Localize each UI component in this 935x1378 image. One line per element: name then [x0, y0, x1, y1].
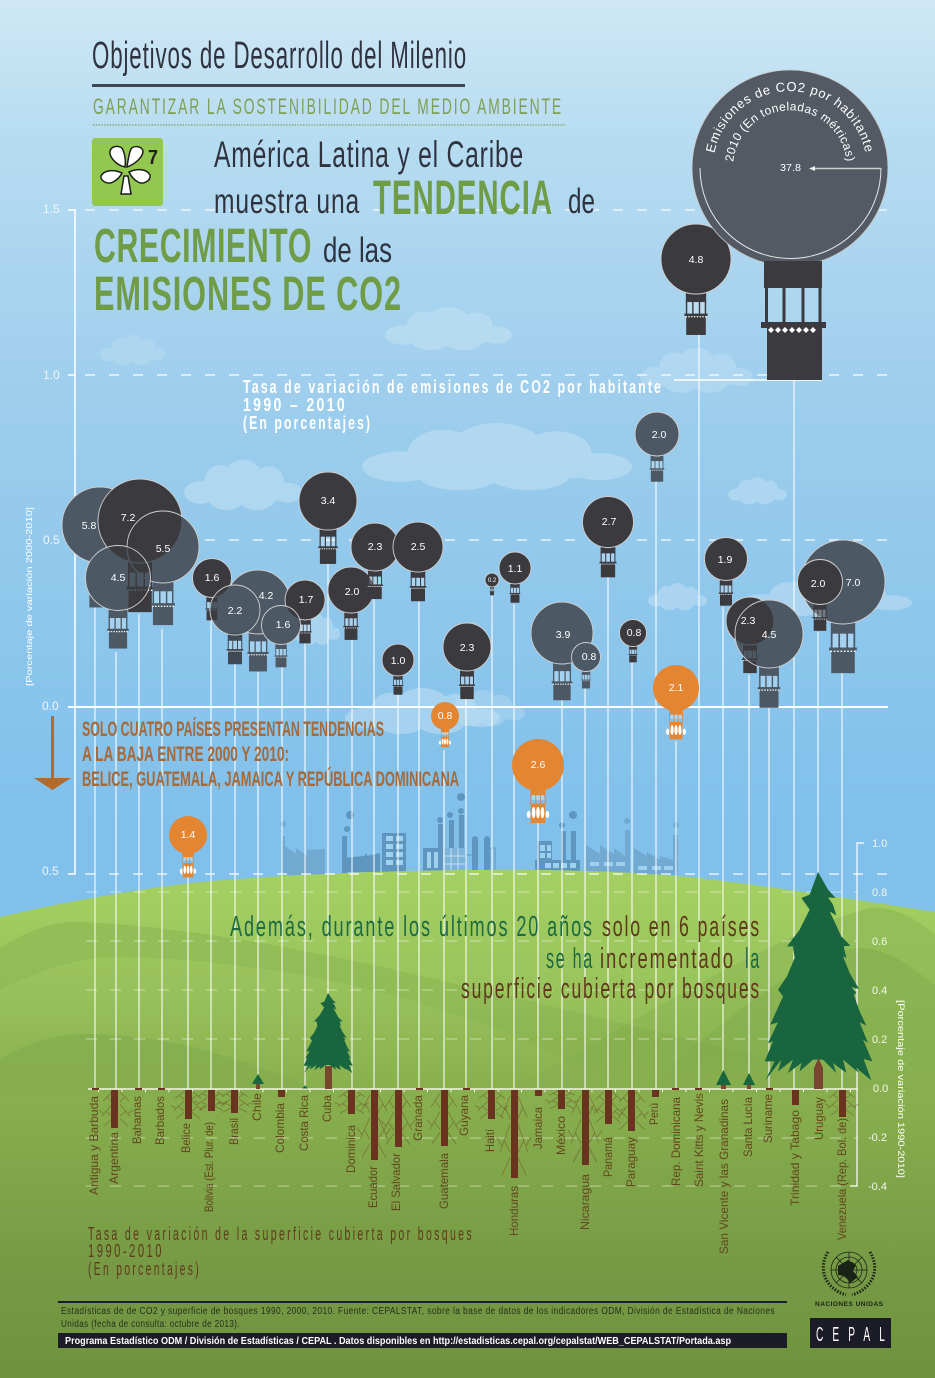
chart title: forests: 1990-2010	[88, 1241, 164, 1261]
forest gridlines	[86, 892, 858, 1186]
balloon: Suriname 4.5: 4.5	[762, 629, 776, 641]
balloon: México 3.9	[531, 602, 593, 700]
balloon: Uruguay 2.0: 2.0	[811, 578, 825, 590]
CO2 chart axes: left axis with gridlines: 1.5	[43, 202, 60, 216]
icon: goal 7 clover	[92, 138, 163, 206]
headline: TENDENCIA	[373, 172, 553, 225]
factory 3	[423, 793, 495, 874]
balloon: Belice 1.4 (downward)	[169, 816, 207, 877]
country labels: Guyana	[457, 1095, 471, 1136]
balloon: Cuba 3.4: 3.4	[321, 495, 335, 507]
icon: goal 7 clover: 7	[148, 147, 158, 169]
CO2 chart axes: left axis with gridlines	[42, 202, 888, 878]
country labels: Paraguay	[624, 1137, 638, 1187]
footer link bar: Programa Estadístico ODM / División de Estadísticas / CEPAL . Datos disponibles en http://estadisticas.cepal.org/cepalstat/WEB_CEPALSTAT/Portada.asp	[65, 1335, 731, 1347]
country labels: Rep. Dominicana	[669, 1097, 683, 1186]
callout: downward trend countries: BELICE, GUATEMALA, JAMAICA Y REPÚBLICA DOMINICANA	[82, 767, 459, 791]
tree: San Vicente y las Granadinas	[716, 1070, 731, 1089]
balloons: CO2 variation by country	[62, 70, 888, 878]
right axis title: [Porcentaje de variación 1990-2010]	[895, 1000, 906, 1178]
factory 6	[634, 822, 679, 875]
logo: Naciones Unidas	[815, 1252, 884, 1308]
balloon: Trinidad y Tabago 37.8: 2010 (En toneladas métricas)	[725, 102, 855, 162]
balloon: Uruguay 2.0	[798, 560, 842, 631]
clouds	[100, 307, 912, 734]
callout: downward trend countries: SOLO CUATRO PAÍSES PRESENTAN TENDENCIAS	[82, 718, 384, 741]
forest callout: la	[745, 943, 761, 975]
balloon: Belice 1.4 (downward): 1.4	[181, 829, 195, 841]
balloon: Antigua y Barbuda 5.8: 5.8	[82, 520, 96, 532]
balloon: Costa Rica 1.7	[285, 580, 325, 643]
country labels: Bahamas	[130, 1096, 144, 1144]
balloon: Jamaica 2.6 (downward)	[512, 739, 564, 823]
balloon: Paraguay 0.8	[620, 620, 646, 662]
balloon: Colombia 1.6: 1.6	[276, 619, 290, 631]
chart title: forests: Tasa de variación de la superficie cubierta por bosques	[88, 1224, 474, 1244]
forest callout	[230, 911, 761, 1005]
headline	[94, 134, 595, 321]
subtitle: GARANTIZAR LA SOSTENIBILIDAD DEL MEDIO AMBIENTE	[93, 94, 563, 119]
tree: Cuba	[304, 993, 353, 1089]
balloon: Rep. Dominicana 2.1 (downward): 2.1	[669, 682, 683, 694]
footer source	[58, 1301, 787, 1330]
balloon: Suriname 4.5	[735, 600, 803, 708]
forest roots	[99, 1091, 859, 1175]
balloon: Guyana 2.3: 2.3	[460, 642, 474, 654]
right axis	[88, 838, 888, 1193]
balloon: Dominica 2.0: 2.0	[345, 586, 359, 598]
balloon: El Salvador 1.0: 1.0	[391, 655, 405, 667]
balloon: Guyana 2.3	[443, 623, 491, 699]
tree: Uruguay	[765, 872, 872, 1089]
balloon: Costa Rica 1.7: 1.7	[299, 594, 313, 606]
balloon: Chile 4.2	[226, 570, 290, 671]
headline: América Latina y el Caribe	[214, 134, 524, 175]
forest callout: solo en 6 países	[602, 911, 761, 943]
tree: Chile	[252, 1074, 264, 1089]
country labels: Perú	[647, 1103, 661, 1125]
right axis: 0.0	[873, 1083, 888, 1095]
footer source: Unidas (fecha de consulta: octubre de 2013).	[61, 1319, 240, 1330]
balloon: Ecuador 2.3: 2.3	[368, 541, 382, 553]
forest bars (negative variation)	[92, 1088, 846, 1178]
balloon: Bahamas 7.2: 7.2	[121, 512, 135, 524]
balloon: Panamá 2.7	[582, 496, 634, 577]
factories skyline	[280, 793, 679, 876]
factory 4	[535, 811, 580, 874]
CO2 chart axes: left axis with gridlines: 0.5	[42, 864, 59, 878]
chart title: CO2	[243, 377, 663, 433]
country labels: Ecuador	[366, 1166, 380, 1208]
factory 5	[586, 818, 630, 875]
balloon: Ecuador 2.3	[351, 523, 399, 599]
balloon: Perú 2.0: 2.0	[652, 429, 666, 441]
value: Santa Lucía 2.3: 2.3	[741, 615, 755, 627]
headline: CRECIMIENTO	[94, 220, 312, 273]
balloon: Granada 2.5: 2.5	[411, 541, 425, 553]
logo: CEPAL	[810, 1318, 894, 1348]
country labels: Jamaica	[531, 1107, 545, 1149]
right axis: -0.4	[868, 1181, 887, 1193]
CO2 chart axes: left axis with gridlines: 1.0	[43, 368, 60, 382]
right axis: 0.2	[872, 1034, 887, 1046]
country labels: El Salvador	[389, 1153, 403, 1211]
tree: Santa Lucía	[743, 1073, 755, 1089]
balloon: Nicaragua 0.8: 0.8	[582, 651, 596, 663]
callout: downward trend countries	[82, 718, 459, 791]
country labels: México	[554, 1116, 568, 1155]
country labels: San Vicente y las Granadinas	[717, 1099, 731, 1254]
balloon: Paraguay 0.8: 0.8	[627, 627, 641, 639]
country labels: Belice	[179, 1123, 193, 1153]
country labels: Venezuela (Rep. Bol. de)	[835, 1118, 849, 1240]
country labels: Brasil	[227, 1118, 241, 1145]
balloon: Bolivia 1.6: 1.6	[205, 572, 219, 584]
balloon: Trinidad y Tabago 37.8	[674, 70, 888, 381]
country strings	[95, 335, 842, 1089]
factory 1	[280, 821, 325, 876]
headline: EMISIONES DE CO2	[94, 268, 402, 321]
balloon: El Salvador 1.0	[382, 644, 414, 695]
right axis: 0.4	[872, 985, 887, 997]
balloon: Saint Kitts y Nevis 4.8	[661, 224, 731, 335]
balloon: Chile 4.2: 4.2	[259, 590, 273, 602]
country labels: Trinidad y Tabago	[788, 1110, 802, 1206]
balloon: Santa Lucía 2.3	[726, 597, 774, 673]
chart title: CO2: Tasa de variación de emisiones de CO2 por habitante	[243, 377, 663, 397]
headline: muestra una	[214, 182, 360, 221]
balloon: Brasil 2.2: 2.2	[228, 605, 242, 617]
balloon: Cuba 3.4	[299, 472, 357, 564]
left axis title: [Porcentaje de variación 2000-2010]	[24, 507, 34, 686]
balloon: Barbados 5.5: 5.5	[156, 543, 170, 555]
balloon: Guatemala 0.8 (downward): 0.8	[438, 710, 452, 722]
right axis: 1.0	[872, 838, 887, 850]
balloon: Colombia 1.6	[262, 606, 300, 667]
country labels: Guatemala	[437, 1153, 451, 1209]
country labels: Haití	[483, 1128, 497, 1152]
country labels: Saint Kitts y Nevis	[692, 1093, 706, 1187]
country labels: Bolivia (Est. Plur. de)	[202, 1122, 216, 1212]
arrow: downward	[34, 716, 71, 790]
balloon: Honduras 1.1: 1.1	[508, 563, 522, 575]
country labels: Suriname	[761, 1094, 775, 1143]
balloon: Jamaica 2.6 (downward): 2.6	[531, 759, 545, 771]
balloon: México 3.9: 3.9	[556, 629, 570, 641]
balloon: San Vicente 1.9	[704, 538, 748, 606]
balloon: Panamá 2.7: 2.7	[602, 516, 616, 528]
country labels	[87, 1093, 849, 1254]
country labels: Costa Rica	[297, 1095, 311, 1151]
chart title: CO2: (En porcentajes)	[243, 413, 372, 433]
balloon: Brasil 2.2	[210, 585, 260, 664]
callout: downward trend countries: A LA BAJA ENTRE 2000 Y 2010:	[82, 743, 289, 766]
balloon: San Vicente 1.9: 1.9	[718, 554, 732, 566]
forest callout: Además, durante los últimos 20 años	[230, 911, 594, 943]
country labels: Santa Lucía	[741, 1097, 755, 1157]
title: Objetivos de Desarrollo del Milenio	[92, 35, 467, 77]
forest callout: se ha	[546, 943, 594, 975]
factory 2	[342, 811, 406, 874]
headline: de las	[323, 231, 392, 270]
country labels: Barbados	[153, 1096, 167, 1145]
balloon: Granada 2.5	[393, 522, 443, 601]
balloon: Venezuela 7.0: 7.0	[846, 577, 860, 589]
footer source: Estadísticas de de CO2 y superficie de bosques 1990, 2000, 2010. Fuente: CEPALSTAT, sobre la base de datos de los indicadores ODM, División de Estadística de Naciones	[61, 1306, 775, 1317]
chart title: forests: (En porcentajes)	[88, 1259, 201, 1279]
balloon: Venezuela 7.0	[801, 540, 885, 673]
right axis: 0.8	[872, 887, 887, 899]
balloon: Argentina 4.5: 4.5	[111, 572, 125, 584]
balloon: Honduras 1.1	[499, 552, 531, 603]
country labels: Granada	[411, 1095, 425, 1141]
country labels: Nicaragua	[578, 1174, 592, 1230]
balloon: Trinidad y Tabago 37.8: 37.8	[780, 162, 801, 174]
right axis: -0.2	[868, 1132, 887, 1144]
balloon: Haití 0.2	[485, 573, 499, 595]
balloon: Rep. Dominicana 2.1 (downward)	[653, 665, 699, 739]
title rule	[92, 84, 465, 87]
balloon: Bolivia 1.6	[192, 558, 232, 620]
balloon: Saint Kitts y Nevis 4.8: 4.8	[689, 254, 703, 266]
country labels: Dominica	[344, 1125, 358, 1173]
balloon: Antigua y Barbuda 5.8	[62, 487, 138, 607]
country labels: Honduras	[507, 1186, 521, 1236]
balloon: Guatemala 0.8 (downward)	[431, 702, 459, 747]
balloon: Perú 2.0	[635, 412, 679, 482]
country labels: Argentina	[107, 1132, 121, 1184]
balloon: Bahamas 7.2	[98, 479, 182, 612]
balloon: Haití 0.2: 0.2	[488, 578, 497, 584]
tree: Costa Rica	[302, 1086, 308, 1088]
balloon: Barbados 5.5	[127, 511, 199, 625]
balloon: Nicaragua 0.8	[572, 642, 600, 688]
headline: de	[568, 182, 595, 221]
CO2 chart axes: left axis with gridlines: 0.5	[43, 533, 60, 547]
chart title: forests	[88, 1224, 474, 1279]
country labels: Panamá	[601, 1137, 615, 1177]
country labels: Colombia	[273, 1103, 287, 1153]
CO2 chart axes: left axis with gridlines: 0.0	[42, 699, 59, 713]
balloon: Dominica 2.0	[328, 567, 374, 640]
right axis: 0.6	[872, 936, 887, 948]
balloon: Argentina 4.5	[86, 546, 150, 649]
country labels: Chile	[250, 1093, 264, 1121]
logo: Naciones Unidas: NACIONES UNIDAS	[815, 1301, 884, 1308]
forest callout: incrementado	[600, 943, 735, 975]
green hills	[0, 870, 935, 1378]
balloon: Trinidad y Tabago 37.8: Emisiones de CO2 por habitante	[706, 82, 872, 152]
country labels: Uruguay	[812, 1097, 826, 1140]
country labels: Cuba	[320, 1095, 334, 1122]
dotted rule	[93, 124, 565, 126]
chart title: CO2: 1990 – 2010	[243, 395, 347, 415]
country labels: Antigua y Barbuda	[87, 1096, 101, 1195]
